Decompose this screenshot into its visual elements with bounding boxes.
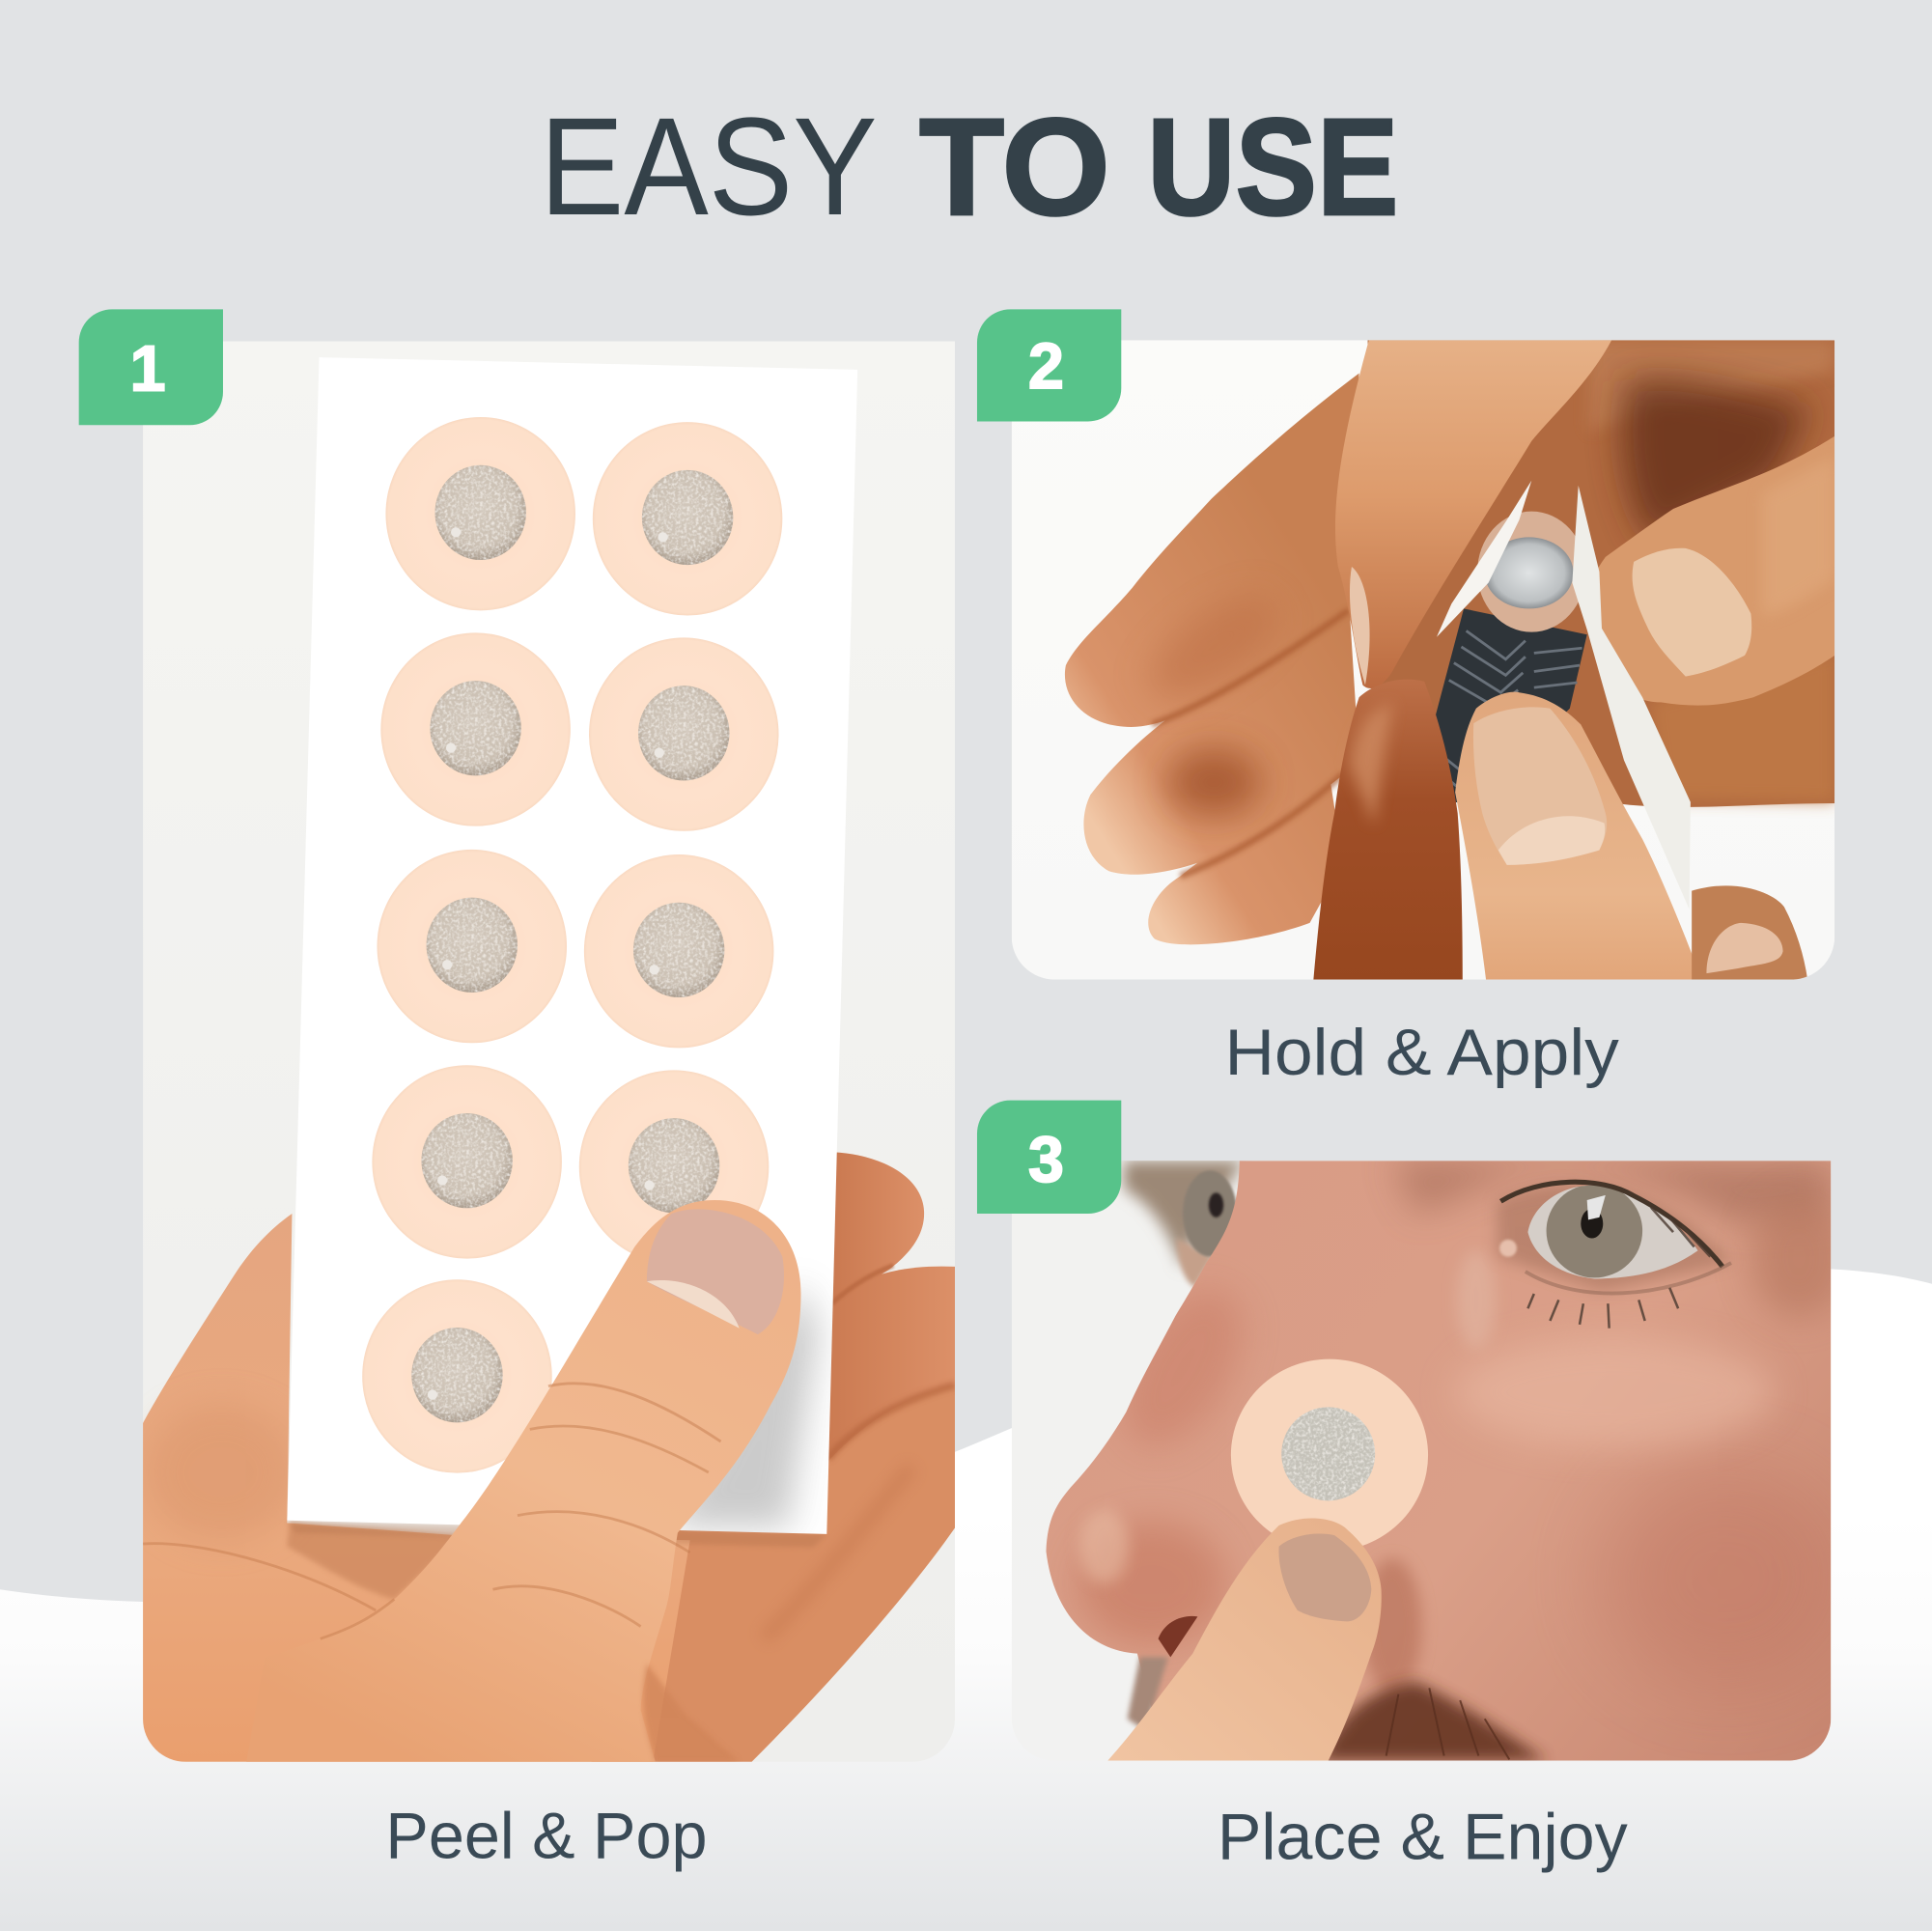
top index nail	[1350, 567, 1370, 686]
top index finger	[1335, 340, 1611, 688]
panel 1 backdrop	[143, 342, 955, 1762]
face and detail	[1035, 1161, 1848, 1764]
right eye	[1498, 1177, 1731, 1329]
title light word: EASY	[540, 88, 878, 244]
beard	[1318, 1682, 1547, 1761]
brow shade above eye	[1392, 1161, 1831, 1224]
patch ring	[1477, 512, 1585, 632]
far eye lashes and hair	[1124, 1161, 1245, 1269]
nail thumb nail	[1473, 707, 1607, 865]
far eye iris	[1183, 1170, 1237, 1257]
finger	[1107, 1518, 1382, 1761]
badge 2 shape	[977, 309, 1121, 421]
pen	[1427, 608, 1587, 807]
shadow under finger	[1362, 1558, 1422, 1694]
left liner strip	[1437, 481, 1531, 637]
finger 1 shading	[1134, 578, 1293, 715]
patch r4c2	[579, 1070, 769, 1264]
under eye light	[1454, 1337, 1775, 1447]
card shadow	[287, 1521, 826, 1548]
face	[1035, 1161, 1835, 1764]
title bold word to: TO	[919, 91, 1110, 244]
badge 1	[79, 309, 223, 425]
iris	[1547, 1184, 1642, 1277]
inner eye pale skin	[1456, 1250, 1496, 1349]
white wave background shape	[0, 1266, 1932, 1931]
palm upper rosy shade	[156, 1413, 294, 1529]
patch r5c1	[362, 1279, 552, 1473]
nose tip highlight	[1079, 1509, 1129, 1583]
thumb shadow on card	[665, 1281, 820, 1527]
lighter hand right lower	[1651, 653, 1834, 801]
panel 3: place and enjoy photo	[1012, 1161, 1848, 1764]
nose side shade	[1078, 1522, 1226, 1645]
dark shadow in hand	[1622, 378, 1811, 543]
title	[540, 88, 1398, 244]
panel 1: peel and pop photo	[143, 342, 955, 1762]
back of hand	[1368, 340, 1834, 807]
finger 1 to 2 crease	[1152, 610, 1349, 724]
nail thumb	[1455, 692, 1701, 980]
thumb	[246, 1200, 800, 1762]
caption: hold and apply: Hold & Apply	[1224, 1017, 1619, 1089]
finger 2 to 3 crease	[1181, 773, 1343, 876]
badge 3 number: 3	[1028, 1125, 1064, 1196]
badge 1 number: 1	[130, 334, 166, 406]
front finger highlight	[1349, 702, 1392, 826]
silver dome	[1485, 537, 1574, 608]
outer eye corner shade	[1750, 1195, 1848, 1318]
patch r3c2	[584, 854, 773, 1048]
inner eye corner	[1499, 1240, 1517, 1257]
nail thumb lunula	[1498, 816, 1605, 865]
beard hairs	[1386, 1688, 1509, 1759]
lash strands	[1527, 1208, 1710, 1329]
patch card	[287, 357, 857, 1534]
back fingers	[592, 1152, 955, 1762]
left finger 2 dark spot	[1167, 748, 1260, 817]
little finger	[1692, 885, 1807, 980]
front lower finger	[1313, 680, 1463, 980]
right thumb	[1589, 436, 1834, 706]
right liner strip	[1572, 486, 1691, 910]
far eye pupil	[1209, 1192, 1223, 1217]
right thumb nail	[1633, 548, 1751, 677]
pen chevrons	[1427, 630, 1582, 798]
thumb wrinkle shade	[1762, 456, 1834, 616]
caption: place and enjoy: Place & Enjoy	[1218, 1802, 1628, 1874]
eye highlight	[1587, 1195, 1606, 1219]
badge 2	[977, 309, 1121, 421]
eye socket shade	[1498, 1186, 1731, 1291]
caption: peel and pop: Peel & Pop	[385, 1800, 708, 1872]
applied patch dome	[1281, 1407, 1375, 1500]
patch r4c1	[372, 1065, 562, 1259]
little finger nail	[1706, 923, 1783, 973]
top hand light band	[1589, 340, 1834, 432]
pen body	[1427, 608, 1587, 807]
mustache left	[1128, 1657, 1168, 1731]
lower lid	[1526, 1263, 1731, 1294]
left finger 2	[1083, 603, 1359, 875]
panel 2: hold and apply photo	[1012, 340, 1834, 980]
eye white	[1522, 1177, 1706, 1288]
nose bridge redness	[1099, 1270, 1267, 1466]
badge 1 shape	[79, 309, 223, 425]
finger nail	[1278, 1533, 1371, 1621]
far eye socket skin	[1177, 1239, 1214, 1288]
web shadow under card	[287, 1523, 462, 1599]
panel 2 backdrop	[1012, 340, 1834, 980]
patches grid	[362, 417, 782, 1473]
patch r3c1	[378, 850, 567, 1043]
badge 2 number: 2	[1028, 331, 1064, 403]
thumb base shade	[643, 1664, 740, 1762]
patch r1c2	[593, 422, 782, 615]
eye opening	[1522, 1177, 1706, 1288]
badge 3 shape	[977, 1101, 1121, 1214]
thumb nail	[647, 1209, 784, 1334]
panel 3 backdrop	[1012, 1161, 1831, 1761]
upper lash	[1500, 1182, 1722, 1267]
cheek redness	[1602, 1467, 1848, 1688]
thumb nail lunula	[647, 1280, 740, 1329]
nostril	[1159, 1616, 1197, 1657]
title bold word use: USE	[1147, 91, 1398, 244]
palm	[143, 1214, 690, 1762]
skin creases	[143, 1384, 721, 1638]
patch r2c1	[380, 632, 571, 826]
applied patch	[1231, 1359, 1428, 1552]
pupil	[1581, 1209, 1603, 1239]
patch r2c2	[589, 637, 779, 831]
left finger 1	[1065, 374, 1359, 727]
badge 3	[977, 1101, 1121, 1214]
gap highlight between fingers	[1281, 762, 1329, 802]
patch r1c1	[385, 417, 575, 610]
left finger 3	[1148, 784, 1343, 944]
